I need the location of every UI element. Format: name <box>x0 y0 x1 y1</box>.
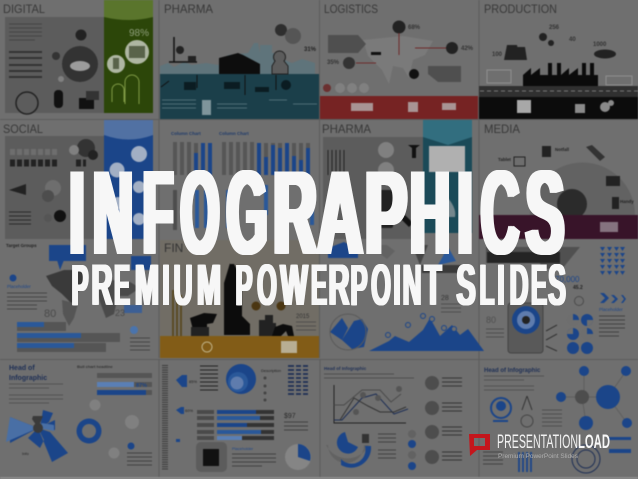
panel: rank list with circle chart: Description <box>261 368 281 373</box>
title: C <box>481 146 519 280</box>
panel: line chart: Head of Infographic <box>324 366 367 371</box>
panel: media: Notfall <box>555 147 569 152</box>
panel: media: MEDIA <box>484 122 520 136</box>
panel: head of infographic with rose chart: 87% <box>136 383 147 389</box>
panel: pharma statistics: PHARMA <box>322 122 371 136</box>
panel: rank list with circle chart: $97 <box>284 413 296 420</box>
panel: social: SOCIAL <box>3 122 43 136</box>
panel: rank list with circle chart: 60% <box>185 408 193 413</box>
panel: finance: 2015 <box>296 314 310 320</box>
panel: target groups map: Target Groups <box>6 243 37 248</box>
panel: column charts: Column Chart <box>171 131 201 136</box>
panel: head of infographic with rose chart: Bull chart headline <box>77 364 114 369</box>
subtitle: L <box>480 253 494 318</box>
subtitle: R <box>92 253 112 318</box>
title: P <box>365 146 407 280</box>
panel: column charts: Column Chart <box>219 131 249 136</box>
subtitle: I <box>162 253 170 318</box>
panel: rank list with circle chart: 85% <box>189 379 197 384</box>
panel: logistics: LOGISTICS <box>324 2 378 16</box>
panel: smartphone statistics: 70,000 <box>555 275 580 284</box>
subtitle: O <box>257 253 277 318</box>
panel: digital <box>3 0 153 114</box>
panel: rank list with circle chart: Placeholder <box>232 446 254 451</box>
logo: PresentationLoad <box>469 432 610 460</box>
title: I <box>457 146 473 280</box>
panel: column charts <box>171 131 314 230</box>
panel: digital: 98% <box>129 28 149 39</box>
subtitle: M <box>197 253 221 318</box>
panel: smartphone statistics <box>486 247 626 354</box>
panel: pharma process <box>160 2 319 119</box>
title: N <box>93 146 133 280</box>
tagline: Premium PowerPoint Slides <box>498 453 579 460</box>
panel: logistics: 35% <box>327 60 340 66</box>
wordmark: PRESENTATION <box>497 432 578 453</box>
panel: media <box>479 122 638 239</box>
panel: social <box>3 120 153 239</box>
subtitle: E <box>531 253 547 318</box>
title: G <box>226 146 268 280</box>
panel: head of infographic with rose chart: Info <box>22 451 29 456</box>
panel: production <box>479 2 638 119</box>
subtitle: E <box>114 253 130 318</box>
panel: head of infographic with rose chart: Infographic <box>9 375 47 382</box>
panel: line chart <box>324 366 462 470</box>
panel: target groups map: Placeholder <box>7 284 31 289</box>
panel: smartphone statistics: 80 <box>486 315 496 325</box>
title: I <box>69 146 85 280</box>
subtitle: E <box>311 253 327 318</box>
title <box>69 146 565 280</box>
title: S <box>526 146 564 280</box>
panel: head of infographic with rose chart: Head of <box>9 365 35 372</box>
title: R <box>273 146 317 280</box>
title: O <box>180 146 220 280</box>
panel: production: 1000 <box>593 42 607 48</box>
panel: smartphone statistics: Placeholder <box>599 307 623 312</box>
subtitle: R <box>329 253 349 318</box>
panel: target groups map <box>6 243 151 352</box>
subtitle: D <box>510 253 528 318</box>
subtitle: I <box>393 253 401 318</box>
logo: PresentationLoad: LOAD <box>578 432 610 453</box>
panel: head of infographic with rose chart <box>6 364 152 465</box>
panel: production: 100 <box>492 52 503 58</box>
panel: rank list with circle chart <box>165 364 311 472</box>
title: H <box>410 146 450 280</box>
panel: network diagram: Head of Infographic <box>484 368 541 374</box>
title: A <box>317 146 363 280</box>
subtitle: S <box>548 253 566 318</box>
panel: logistics <box>320 2 478 119</box>
panel: finance <box>160 240 319 358</box>
panel: pharma process: 31% <box>304 47 317 53</box>
panel: target groups map: 23 <box>115 308 125 318</box>
subtitle: P <box>350 253 368 318</box>
title: F <box>143 146 173 280</box>
subtitle: W <box>280 253 308 318</box>
subtitle: P <box>235 253 253 318</box>
panel: pharma process: PHARMA <box>164 2 213 16</box>
panel: media: Tablet <box>498 157 511 162</box>
subtitle: P <box>71 253 89 318</box>
subtitle: N <box>403 253 421 318</box>
panel: network diagram <box>483 366 632 473</box>
panel: digital: DIGITAL <box>3 2 45 16</box>
panel: production: PRODUCTION <box>484 2 557 16</box>
subtitle: O <box>371 253 391 318</box>
subtitle: U <box>174 253 192 318</box>
subtitle: S <box>456 253 476 318</box>
panel: target groups map: 80 <box>44 308 56 320</box>
icon: red speech bubble <box>469 434 490 456</box>
panel: pharma statistics <box>322 120 472 239</box>
subtitle: M <box>135 253 159 318</box>
panel: production: 256 <box>549 25 560 31</box>
subtitle <box>71 253 566 318</box>
panel: charts and mountain <box>328 242 484 351</box>
panel: media: Handy <box>620 199 634 204</box>
panel: charts and mountain: 28 <box>441 295 449 302</box>
subtitle: T <box>424 253 442 318</box>
panel: finance: FIN <box>164 241 183 255</box>
panel: smartphone statistics: 45.2 <box>573 285 583 291</box>
panel: logistics: 42% <box>461 46 474 52</box>
panel: production: 40 <box>569 37 576 43</box>
panel: logistics: 68% <box>408 25 421 31</box>
subtitle: I <box>497 253 505 318</box>
